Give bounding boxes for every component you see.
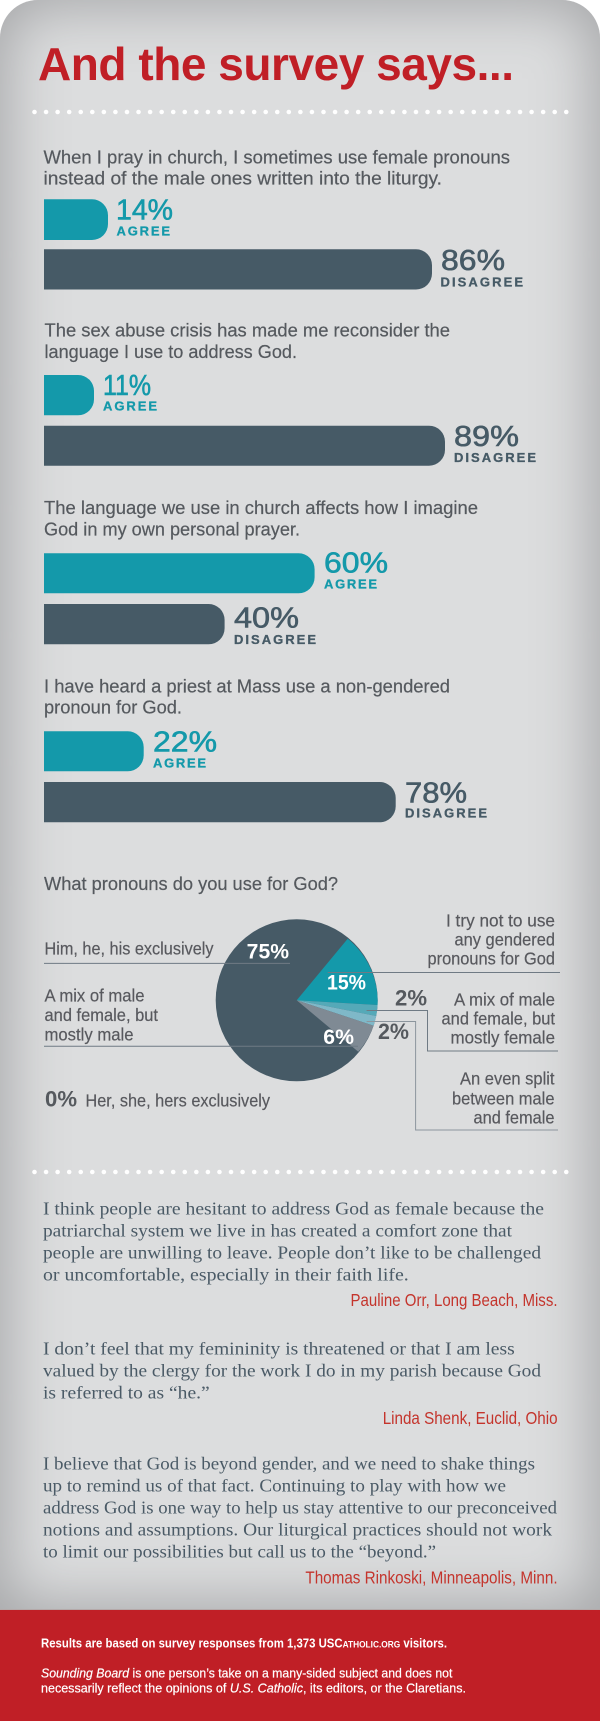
quote: Pauline Orr: patriarchal system we live in has created a comfort zone that xyxy=(43,1220,512,1240)
quote: Thomas Rinkoski: notions and assumptions. Our liturgical practices should not work xyxy=(43,1519,552,1539)
question 3 text: The language we use in church affects how I imagine xyxy=(44,498,478,518)
label: even split: and female xyxy=(474,1107,554,1127)
label: 0% her, she, hers xyxy=(45,1087,270,1112)
label: 22% agree xyxy=(153,727,217,771)
label: 40% disagree xyxy=(234,602,316,647)
label: mostly male xyxy=(44,985,158,1044)
label: mostly female xyxy=(442,989,555,1047)
panel: question 2 xyxy=(44,321,536,466)
label: 40% disagree: 40% xyxy=(234,602,299,634)
slice labels: 2% xyxy=(378,1019,409,1044)
label: mostly female: mostly female xyxy=(450,1027,555,1047)
quote: Thomas Rinkoski: I believe that God is beyond gender, and we need to shake things xyxy=(43,1453,535,1473)
label: mostly female: and female, but xyxy=(442,1008,555,1028)
label: even split xyxy=(452,1068,555,1127)
quote: Thomas Rinkoski: Thomas Rinkoski, Minneapolis, Minn. xyxy=(305,1567,558,1587)
label: even split: between male xyxy=(452,1088,554,1108)
panel: question 4 xyxy=(44,676,487,822)
bar: 89% disagree xyxy=(44,426,445,466)
label: no gendered pronouns xyxy=(428,910,555,968)
panel: question 1 xyxy=(44,147,523,290)
quote: Pauline Orr: I think people are hesitant to address God as female because the xyxy=(43,1198,544,1218)
pie chart xyxy=(216,919,378,1081)
label: 60% agree: 60% xyxy=(324,548,388,580)
panel: pronoun pie chart xyxy=(44,874,560,1130)
question 1 text: When I pray in church, I sometimes use female pronouns xyxy=(44,147,510,167)
slice labels xyxy=(247,940,427,1049)
question 1 text xyxy=(44,147,510,188)
question 4 text: I have heard a priest at Mass use a non-gendered xyxy=(44,676,450,696)
label: 89% disagree: 89% xyxy=(454,421,519,453)
label: 78% disagree: DISAGREE xyxy=(405,806,487,821)
quote: Pauline Orr: Pauline Orr, Long Beach, Miss. xyxy=(350,1290,558,1310)
label: 78% disagree xyxy=(405,777,487,821)
question 1 text: instead of the male ones written into the liturgy. xyxy=(44,168,442,188)
question 4 text xyxy=(44,676,450,718)
label: 60% agree xyxy=(324,548,388,592)
label: mostly male: A mix of male xyxy=(44,985,144,1005)
bar: 22% agree xyxy=(44,731,144,771)
bar: 11% agree xyxy=(44,375,94,415)
bar: 78% disagree xyxy=(44,782,396,822)
label: even split: An even split xyxy=(460,1068,555,1088)
label: 86% disagree: 86% xyxy=(441,245,505,277)
label: no gendered pronouns: any gendered xyxy=(454,929,555,949)
label: 11% agree: AGREE xyxy=(103,399,157,414)
label: 0% her, she, hers: 0% xyxy=(45,1087,77,1112)
label: mostly male: and female, but xyxy=(44,1005,158,1025)
question 2 text: The sex abuse crisis has made me reconsider the xyxy=(44,321,450,341)
title: And the survey says... xyxy=(38,38,514,90)
bar: 14% agree xyxy=(44,199,108,240)
question 3 text: God in my own personal prayer. xyxy=(44,519,300,539)
slice labels: 6% xyxy=(323,1026,354,1049)
label: 11% agree: 11% xyxy=(103,370,151,402)
quote: Linda Shenk: I don’t feel that my femininity is threatened or that I am less xyxy=(43,1338,515,1358)
bar: 86% disagree xyxy=(44,249,432,290)
question 4 text: pronoun for God. xyxy=(44,698,182,718)
label: no gendered pronouns: pronouns for God xyxy=(428,948,555,968)
footer text: Results are based on survey responses from 1,373 USCATHOLIC.ORG visitors. xyxy=(41,1635,447,1650)
label: 60% agree: AGREE xyxy=(324,577,377,592)
label: mostly female: A mix of male xyxy=(454,989,555,1009)
label: 14% agree: AGREE xyxy=(116,224,170,239)
slice labels: 15% xyxy=(327,971,366,994)
quote: Thomas Rinkoski: up to remind us of that fact. Continuing to play with how we xyxy=(43,1475,506,1495)
panel: question 3 xyxy=(44,498,478,647)
quote: Linda Shenk: valued by the clergy for the work I do in my parish because God xyxy=(43,1360,541,1380)
label: 86% disagree xyxy=(440,245,523,290)
bar: 60% agree xyxy=(44,553,315,593)
label: no gendered pronouns: I try not to use xyxy=(446,910,555,930)
quote: Pauline Orr: people are unwilling to leave. People don’t like to be challenged xyxy=(43,1242,541,1262)
quote: Thomas Rinkoski xyxy=(43,1453,558,1587)
label: him, he, his: Him, he, his exclusively xyxy=(44,938,214,958)
question 3 text xyxy=(44,498,478,539)
footer text: Sounding Board is one person’s take on a many-sided subject and does not xyxy=(41,1665,453,1680)
label: 78% disagree: 78% xyxy=(405,777,467,809)
question 2 text xyxy=(44,321,450,362)
leader lines xyxy=(44,963,560,1130)
quote: Linda Shenk xyxy=(43,1338,558,1428)
label: 86% disagree: DISAGREE xyxy=(440,275,523,290)
label: 40% disagree: DISAGREE xyxy=(234,632,316,647)
quote: Pauline Orr: or uncomfortable, especially in their faith life. xyxy=(43,1264,409,1284)
label: 14% agree: 14% xyxy=(116,194,173,226)
label: 22% agree: 22% xyxy=(153,727,217,759)
question 2 text: language I use to address God. xyxy=(44,342,297,362)
footer text xyxy=(41,1635,466,1695)
footer text: necessarily reflect the opinions of U.S. Catholic, its editors, or the Claretians. xyxy=(41,1680,466,1695)
quote: Thomas Rinkoski: address God is one way to help us stay attentive to our preconceived xyxy=(43,1497,557,1517)
quote: Linda Shenk: Linda Shenk, Euclid, Ohio xyxy=(383,1408,558,1428)
quote: Linda Shenk: is referred to as “he.” xyxy=(43,1382,210,1402)
slice labels: 2% xyxy=(395,986,427,1011)
label: 89% disagree xyxy=(454,421,536,465)
footer band xyxy=(0,1609,600,1721)
pie heading: What pronouns do you use for God? xyxy=(44,874,338,894)
label: 22% agree: AGREE xyxy=(153,756,206,771)
quote: Thomas Rinkoski: to limit our possibilities but call us to the “beyond.” xyxy=(43,1541,436,1561)
label: 89% disagree: DISAGREE xyxy=(454,450,536,465)
slice labels: 75% xyxy=(247,940,289,963)
label: mostly male: mostly male xyxy=(44,1024,134,1044)
bar: 40% disagree xyxy=(44,604,225,644)
label: 0% her, she, hers: Her, she, hers exclusively xyxy=(86,1091,270,1111)
quote: Pauline Orr xyxy=(43,1198,558,1310)
